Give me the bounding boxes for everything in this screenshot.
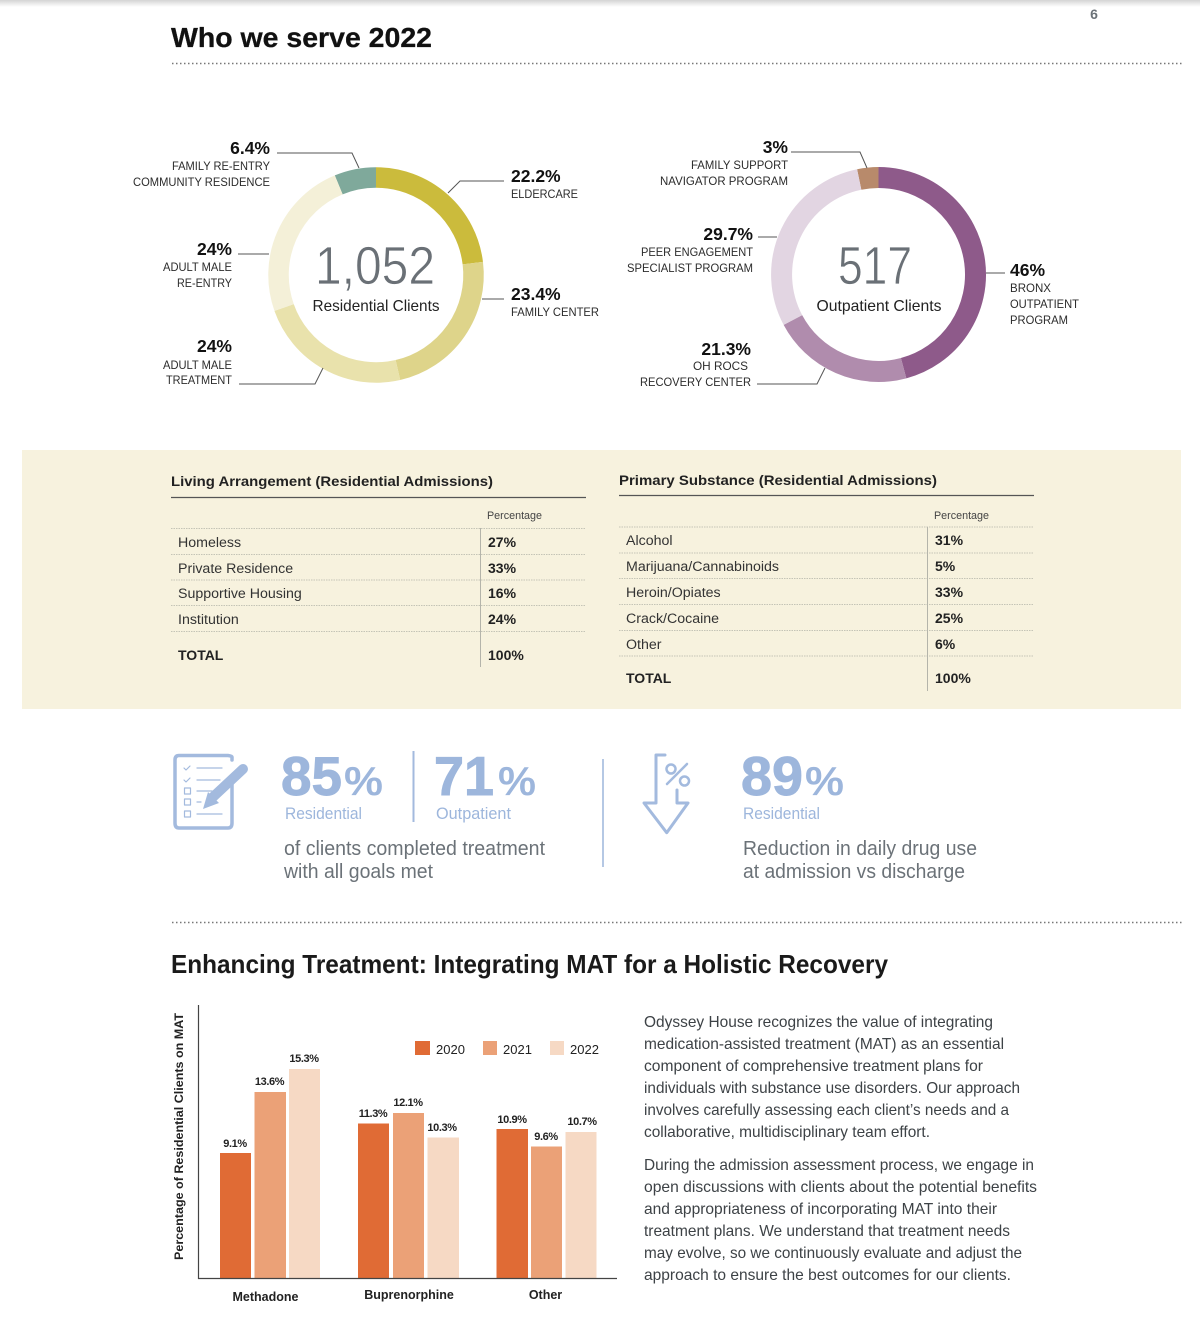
text block: MAT paragraph two: treatment plans. We understand that treatment needs	[644, 1223, 1010, 1240]
text: drug use reduction: Reduction in daily drug use	[743, 838, 977, 860]
table: living arrangement: Institution	[178, 612, 239, 628]
callout: 21.3% oh rocs: OH ROCS	[693, 359, 748, 373]
callout: 6.4% family re-entry	[133, 138, 359, 189]
legend: 2021	[503, 1042, 532, 1057]
table: primary substance	[619, 472, 1034, 691]
segment: family support navigator program	[859, 178, 878, 180]
table: living arrangement: 27%	[488, 534, 517, 550]
legend	[415, 1041, 599, 1057]
text block: MAT paragraph two: During the admission assessment process, we engage in	[644, 1157, 1034, 1174]
bars: methadone	[220, 1053, 320, 1278]
text: treatment completion: with all goals met	[283, 861, 433, 883]
text block: MAT paragraph one: collaborative, multidisciplinary team effort.	[644, 1124, 930, 1141]
table: primary substance: 31%	[935, 532, 964, 548]
table: primary substance: Percentage	[934, 510, 989, 522]
bars: other: 9.6%	[534, 1131, 558, 1143]
text block: MAT paragraph one: Odyssey House recognizes the value of integrating	[644, 1014, 993, 1031]
text block: MAT paragraph one	[644, 1014, 1020, 1141]
callout: 29.7% peer engagement	[627, 224, 777, 275]
text block: MAT paragraph two: may evolve, so we continuously evaluate and adjust the	[644, 1245, 1022, 1262]
donut chart: residential clients	[279, 178, 474, 372]
stat: 85% residential: Residential	[285, 804, 362, 823]
table: living arrangement: Homeless	[178, 535, 241, 551]
table: primary substance: Marijuana/Cannabinoids	[626, 559, 779, 575]
callout: 24% adult male treatment	[163, 336, 323, 387]
stat: 71% outpatient: Outpatient	[436, 804, 511, 823]
callout: 22.2% eldercare: 22.2%	[511, 166, 561, 186]
legend: 2022	[570, 1042, 599, 1057]
bars: other: 10.9%	[497, 1114, 527, 1126]
callout: 21.3% oh rocs: RECOVERY CENTER	[640, 375, 751, 389]
bars: buprenorphine: 10.3%	[427, 1122, 457, 1134]
category labels	[233, 1288, 562, 1304]
table: primary substance: 25%	[935, 610, 964, 626]
stat: 71% outpatient: %	[498, 758, 536, 804]
stat: 85% residential: %	[344, 758, 383, 804]
stat: 71% outpatient	[434, 745, 536, 823]
callout: 24% adult male re-entry: RE-ENTRY	[177, 276, 232, 290]
donut chart: outpatient clients	[782, 178, 976, 371]
segment: adult male treatment	[284, 308, 398, 372]
callout: 23.4% family center: FAMILY CENTER	[511, 305, 599, 319]
category labels: Buprenorphine	[364, 1288, 454, 1302]
callout: 24% adult male re-entry	[163, 239, 269, 290]
stat: 89% residential: Residential	[743, 804, 820, 823]
stat: 71% outpatient: 71	[434, 745, 494, 807]
callout: 24% adult male treatment: 24%	[197, 336, 232, 356]
segment: peer engagement specialist program	[782, 180, 859, 320]
text block: MAT paragraph two: approach to ensure the best outcomes for our clients.	[644, 1267, 1011, 1284]
stat: 85% residential: 85	[281, 745, 342, 807]
callout: 6.4% family re-entry: COMMUNITY RESIDENCE	[133, 175, 270, 189]
table: living arrangement	[171, 473, 586, 667]
table heading: Primary Substance (Residential Admissions)	[619, 472, 937, 488]
table: living arrangement: Percentage	[487, 510, 542, 522]
table: primary substance: 5%	[935, 558, 956, 574]
table: living arrangement: 16%	[488, 585, 517, 601]
callout: 23.4% family center	[482, 284, 599, 319]
table: living arrangement: 33%	[488, 560, 517, 576]
callout: 6.4% family re-entry: FAMILY RE-ENTRY	[172, 159, 270, 173]
callout: 3% family support: FAMILY SUPPORT	[691, 158, 789, 172]
text block: MAT paragraph one: medication-assisted treatment (MAT) as an essential	[644, 1036, 1004, 1053]
heading: enhancing treatment: Enhancing Treatment: Integrating MAT for a Holistic Recovery	[171, 949, 889, 979]
callout: 29.7% peer engagement: PEER ENGAGEMENT	[641, 245, 754, 259]
callout: 46% bronx outpatient	[986, 260, 1080, 327]
table: primary substance: Alcohol	[626, 533, 673, 549]
table: primary substance: TOTAL	[626, 670, 672, 686]
callout: 3% family support: NAVIGATOR PROGRAM	[660, 174, 788, 188]
callout: 29.7% peer engagement: SPECIALIST PROGRAM	[627, 261, 753, 275]
callout: 24% adult male treatment: TREATMENT	[166, 373, 233, 387]
panel: admissions tables	[22, 450, 1181, 709]
text: treatment completion: of clients completed treatment	[284, 838, 545, 860]
text: drug use reduction	[743, 838, 977, 883]
stat: 89% residential	[741, 745, 844, 823]
label: residential clients: Residential Clients	[312, 298, 440, 315]
bars: methadone: 9.1%	[223, 1138, 247, 1150]
bars: other	[496, 1114, 597, 1278]
bars: other: 10.7%	[567, 1116, 597, 1128]
stat: 85% residential	[281, 745, 383, 823]
segment: adult male re-entry	[279, 185, 339, 308]
text block: MAT paragraph one: involves carefully assessing each client’s needs and a	[644, 1102, 1009, 1119]
callout: 24% adult male treatment: ADULT MALE	[163, 358, 232, 372]
segment: eldercare	[376, 178, 473, 263]
callout: 24% adult male re-entry: ADULT MALE	[163, 260, 232, 274]
callout: 21.3% oh rocs: 21.3%	[701, 339, 751, 359]
text: treatment completion	[283, 838, 545, 883]
callout: 23.4% family center: 23.4%	[511, 284, 561, 304]
legend: 2020	[436, 1042, 465, 1057]
table: living arrangement: TOTAL	[178, 647, 224, 663]
table: primary substance: Other	[626, 637, 662, 653]
callout: 46% bronx outpatient: OUTPATIENT	[1010, 297, 1080, 311]
bars: buprenorphine: 11.3%	[359, 1108, 388, 1120]
category labels: Other	[529, 1288, 562, 1302]
table: primary substance: Crack/Cocaine	[626, 611, 719, 627]
table: living arrangement: 100%	[488, 647, 524, 663]
callout: 3% family support: 3%	[763, 137, 788, 157]
title: Who we serve 2022	[171, 22, 432, 53]
segment: oh rocs recovery center	[793, 320, 904, 371]
callout: 46% bronx outpatient: BRONX	[1010, 281, 1051, 295]
bars: methadone: 15.3%	[289, 1053, 319, 1065]
icon: checklist with pen	[175, 756, 243, 828]
text block: MAT paragraph one: component of comprehensive treatment plans for	[644, 1058, 984, 1075]
callout: 6.4% family re-entry: 6.4%	[230, 138, 270, 158]
stat: 89% residential: 89	[741, 745, 803, 807]
table: primary substance: 100%	[935, 670, 971, 686]
text block: MAT paragraph two	[644, 1157, 1037, 1284]
y axis title: Percentage of Residential Clients on MAT	[172, 1012, 186, 1260]
table: primary substance: 33%	[935, 584, 964, 600]
table: primary substance: Heroin/Opiates	[626, 585, 721, 601]
callout: 29.7% peer engagement: 29.7%	[703, 224, 753, 244]
callout: 21.3% oh rocs	[640, 339, 825, 389]
callout: 22.2% eldercare	[448, 166, 578, 201]
text block: MAT paragraph one: individuals with substance use disorders. Our approach	[644, 1080, 1020, 1097]
callout: 24% adult male re-entry: 24%	[197, 239, 232, 259]
total: 1,052: 1,052	[315, 236, 435, 296]
table heading: Living Arrangement (Residential Admissions)	[171, 473, 493, 489]
text: drug use reduction: at admission vs discharge	[743, 861, 965, 883]
callout: 46% bronx outpatient: 46%	[1010, 260, 1045, 280]
text block: MAT paragraph two: and appropriateness of incorporating MAT into their	[644, 1201, 998, 1218]
bars: methadone: 13.6%	[255, 1076, 285, 1088]
segment: bronx outpatient program	[878, 178, 976, 368]
callout: 22.2% eldercare: ELDERCARE	[511, 187, 578, 201]
icon: percent down arrow	[644, 755, 689, 833]
table: primary substance: 6%	[935, 636, 956, 652]
callout: 3% family support	[660, 137, 867, 188]
table: living arrangement: 24%	[488, 611, 517, 627]
callout: 46% bronx outpatient: PROGRAM	[1010, 313, 1068, 327]
category labels: Methadone	[233, 1290, 299, 1304]
total: 517: 517	[838, 236, 912, 296]
bars: buprenorphine	[358, 1097, 459, 1278]
table: living arrangement: Supportive Housing	[178, 586, 302, 602]
page number: 6	[1090, 6, 1098, 22]
segment: family re-entry community residence	[339, 178, 376, 185]
segment: family center	[398, 263, 474, 370]
bar chart: clients on MAT	[172, 1005, 617, 1304]
stat: 89% residential: %	[805, 758, 844, 804]
table: living arrangement: Private Residence	[178, 561, 293, 577]
label: outpatient clients: Outpatient Clients	[816, 298, 942, 315]
bars: buprenorphine: 12.1%	[393, 1097, 423, 1109]
text block: MAT paragraph two: open discussions with clients about the potential benefits	[644, 1179, 1037, 1196]
